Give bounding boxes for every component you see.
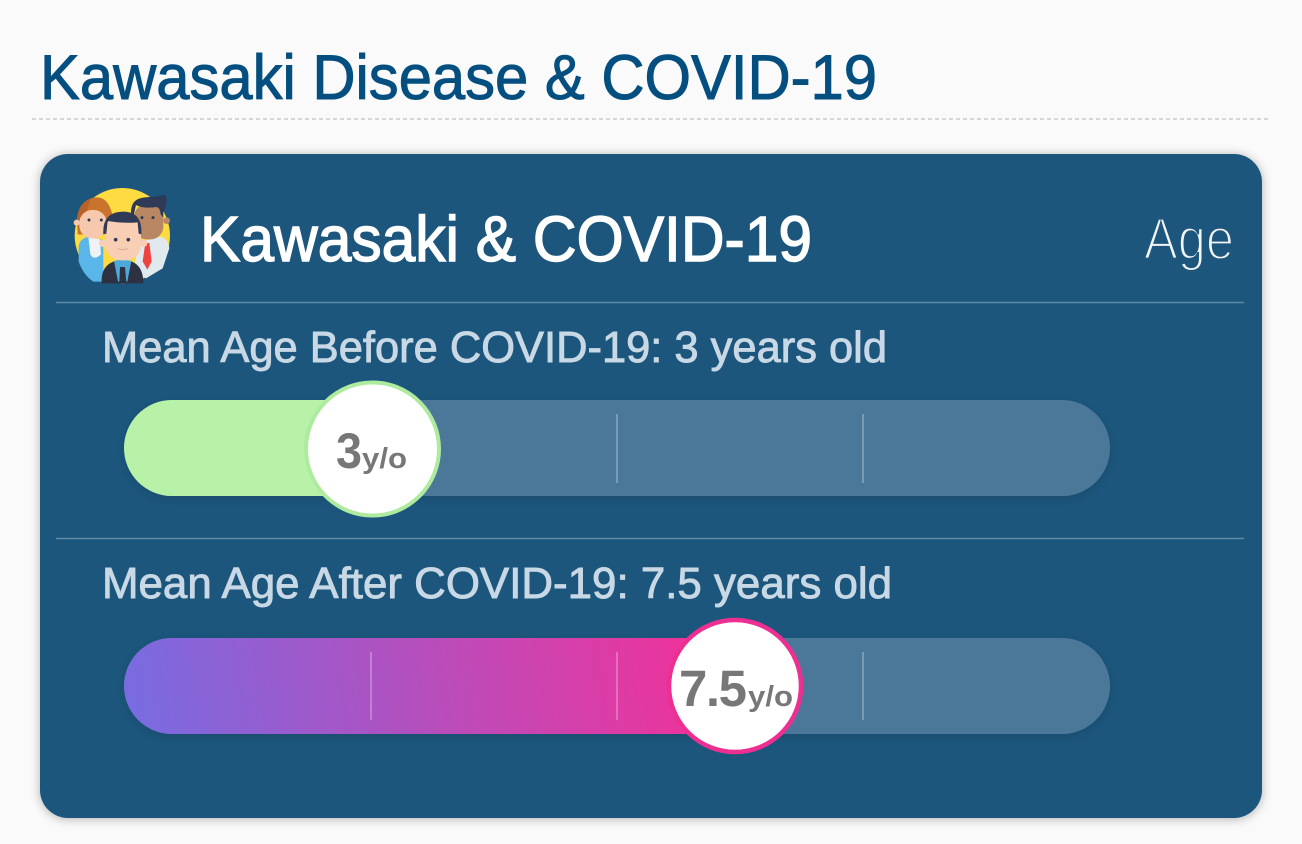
panel: age card (40, 154, 1262, 818)
man right body (133, 237, 169, 278)
woman head (77, 197, 112, 235)
man front suit (102, 259, 143, 283)
icon: group of people (74, 188, 170, 283)
text: before label: Mean Age Before COVID-19: 3 years old (102, 323, 887, 372)
marker: 7.5 y/o: y/o (748, 681, 793, 713)
woman body (79, 237, 103, 282)
marker: 3 y/o (306, 382, 439, 516)
man front head (106, 214, 141, 260)
man right head (134, 204, 163, 239)
bar: age 3 (124, 382, 1110, 516)
section: mean age after (102, 559, 1110, 752)
marker: 3 y/o: 3 (336, 423, 362, 479)
text: after label: Mean Age After COVID-19: 7.5 years old (102, 559, 892, 608)
heading: Kawasaki & COVID-19 (200, 203, 812, 275)
category label: Age (1144, 207, 1234, 272)
marker: 7.5 y/o (669, 620, 801, 752)
bar: age 7.5 (124, 620, 1110, 752)
marker: 3 y/o: y/o (362, 443, 407, 475)
marker: 7.5 y/o: 7.5 (679, 660, 747, 717)
title: Kawasaki Disease & COVID-19 (40, 43, 877, 113)
section: mean age before (102, 323, 1110, 516)
